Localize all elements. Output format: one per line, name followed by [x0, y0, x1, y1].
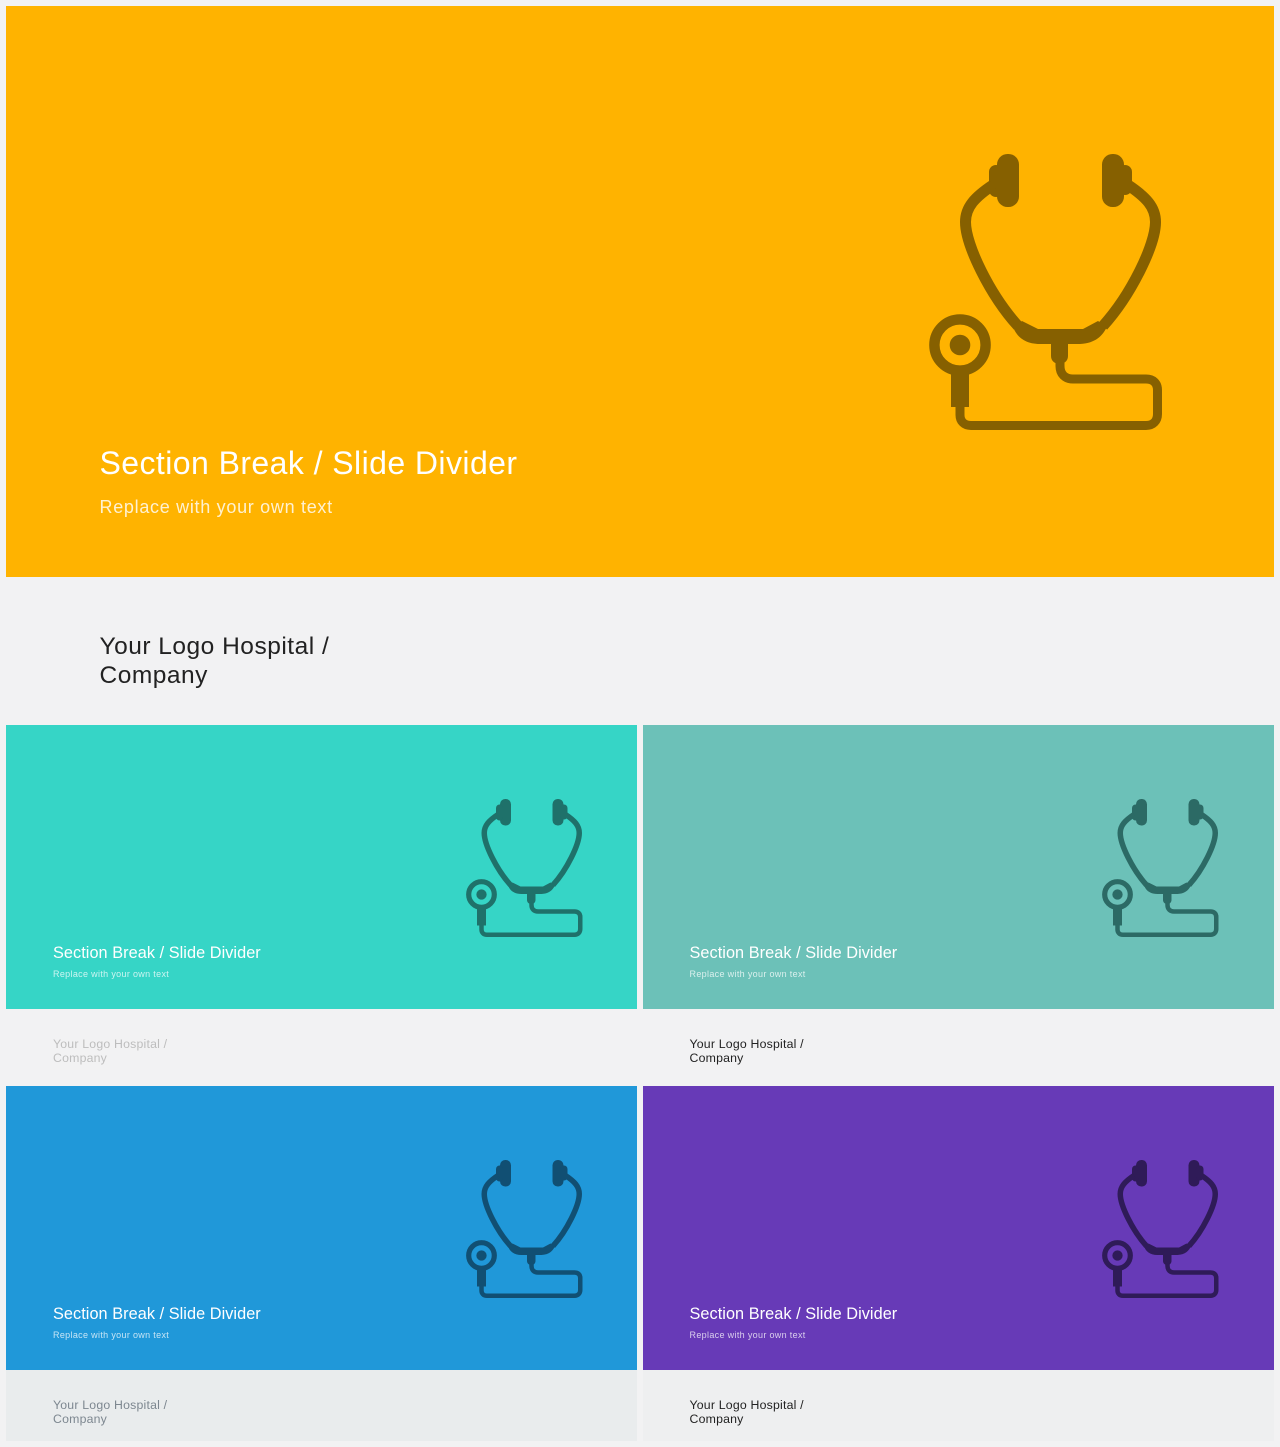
subtitle: blue panel: Replace with your own text	[53, 1330, 169, 1340]
title: purple panel heading: Section Break / Slide Divider	[690, 1305, 897, 1323]
subtitle: purple panel: Replace with your own text	[690, 1330, 806, 1340]
panel: footer strip under purple panel	[643, 1370, 1274, 1441]
text: large logo placeholder: Company	[100, 662, 208, 689]
text: blue panel logo placeholder: Company	[53, 1412, 107, 1426]
subtitle: muted teal panel: Replace with your own text	[690, 969, 806, 979]
panel: footer strip under blue panel	[6, 1370, 637, 1441]
text: blue panel logo placeholder: Your Logo Hospital /	[53, 1398, 167, 1412]
panel: teal section break	[6, 725, 637, 1009]
panel: purple section break	[643, 1086, 1274, 1370]
icon: muted teal panel stethoscope	[1102, 799, 1218, 937]
text: purple panel logo placeholder: Your Logo Hospital /	[690, 1398, 804, 1412]
text: purple panel logo placeholder	[690, 1398, 804, 1426]
text: large logo placeholder	[100, 633, 329, 689]
icon: blue panel stethoscope	[466, 1160, 582, 1298]
text: muted teal panel logo placeholder: Your Logo Hospital /	[690, 1037, 804, 1051]
text: teal panel logo placeholder	[53, 1037, 167, 1065]
title: muted teal panel heading: Section Break / Slide Divider	[690, 944, 897, 962]
panel: muted teal section break	[643, 725, 1274, 1009]
text: large logo placeholder: Your Logo Hospital /	[100, 633, 329, 660]
icon: large stethoscope	[929, 154, 1162, 430]
panel: large amber section break	[6, 6, 1274, 577]
title: blue panel heading: Section Break / Slide Divider	[53, 1305, 261, 1323]
title: teal panel heading: Section Break / Slide Divider	[53, 944, 261, 962]
subtitle: teal panel: Replace with your own text	[53, 969, 169, 979]
text: muted teal panel logo placeholder	[690, 1037, 804, 1065]
icon: purple panel stethoscope	[1102, 1160, 1218, 1298]
text: purple panel logo placeholder: Company	[690, 1412, 744, 1426]
subtitle: large section: Replace with your own text	[100, 497, 333, 517]
icon: teal panel stethoscope	[466, 799, 582, 937]
title: large section heading: Section Break / Slide Divider	[100, 445, 518, 481]
text: blue panel logo placeholder	[53, 1398, 167, 1426]
panel: blue section break	[6, 1086, 637, 1370]
text: teal panel logo placeholder: Company	[53, 1051, 107, 1065]
text: teal panel logo placeholder: Your Logo Hospital /	[53, 1037, 167, 1051]
text: muted teal panel logo placeholder: Company	[690, 1051, 744, 1065]
